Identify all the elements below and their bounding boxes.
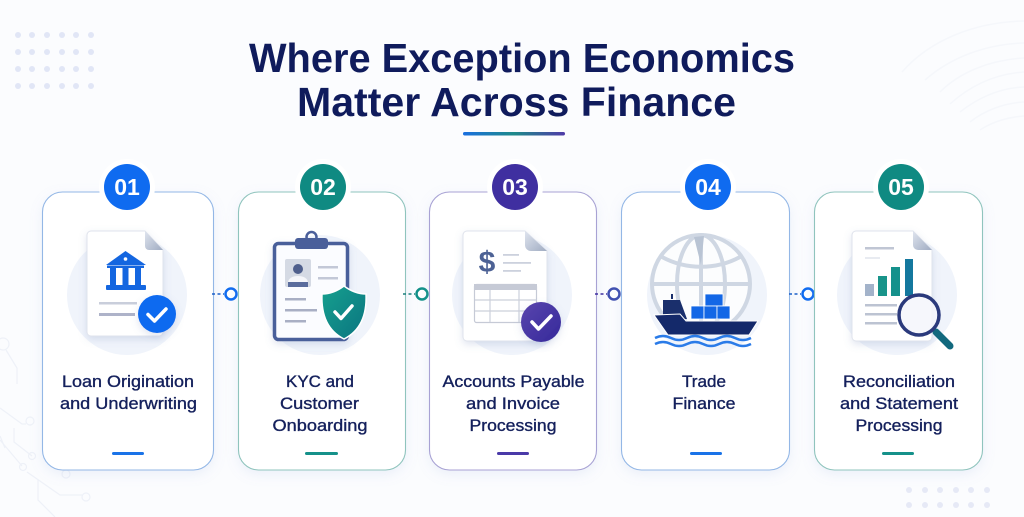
label: Customer — [280, 395, 360, 413]
label — [672, 373, 736, 413]
connector 1 — [212, 288, 236, 300]
label: KYC and — [286, 373, 354, 391]
icon: invoice with check: $ — [479, 246, 496, 279]
icon: report with magnifier — [837, 231, 957, 355]
badge 01: 01 — [114, 174, 140, 200]
label: Processing — [856, 417, 942, 435]
badge 02 — [295, 159, 351, 215]
arc pattern top right — [902, 21, 1024, 130]
panel 01: Loan Origination and Underwriting — [42, 159, 214, 470]
badge 03: 03 — [502, 174, 528, 200]
panel 04: Trade Finance — [622, 159, 790, 470]
accent bar — [690, 452, 722, 455]
label — [840, 373, 958, 435]
label: Accounts Payable — [442, 373, 584, 391]
label: Finance — [672, 395, 736, 413]
badge 03 — [487, 159, 543, 215]
label: Loan Origination — [62, 373, 194, 391]
label — [272, 373, 368, 435]
title: Matter Across Finance — [297, 79, 736, 125]
badge 04: 04 — [695, 174, 721, 200]
panel 02: KYC and Customer Onboarding — [238, 159, 406, 470]
connector 4 — [789, 288, 814, 300]
dot pattern bottom right — [906, 487, 990, 508]
label — [60, 373, 197, 413]
title underline — [463, 132, 565, 136]
connector 2 — [403, 288, 428, 300]
title — [249, 35, 795, 125]
title: Where Exception Economics — [249, 35, 795, 81]
panel 05: Reconciliation and Statement Processing — [814, 159, 982, 470]
label: and Statement — [840, 395, 958, 413]
label: and Invoice — [466, 395, 560, 413]
label: and Underwriting — [60, 395, 197, 413]
label: Processing — [470, 417, 556, 435]
icon: globe and cargo ship — [647, 234, 767, 355]
label: Trade — [682, 373, 726, 391]
icon: invoice with check — [452, 231, 572, 355]
badge 02: 02 — [310, 174, 336, 200]
connector 3 — [595, 288, 620, 300]
badge 01 — [99, 159, 155, 215]
badge 05: 05 — [888, 174, 914, 200]
accent bar — [112, 452, 144, 455]
label: Onboarding — [272, 417, 368, 435]
circuit pattern bottom left — [0, 338, 90, 517]
label: Reconciliation — [843, 373, 955, 391]
dot pattern top left — [15, 32, 94, 89]
label — [442, 373, 584, 435]
badge 05 — [873, 159, 929, 215]
badge 04 — [680, 159, 736, 215]
accent bar — [882, 452, 914, 455]
icon: bank document with check — [67, 231, 187, 355]
accent bar — [305, 452, 338, 455]
accent bar — [497, 452, 529, 455]
icon: clipboard with shield — [260, 232, 380, 355]
panel 03: Accounts Payable and Invoice Processing — [430, 159, 596, 470]
